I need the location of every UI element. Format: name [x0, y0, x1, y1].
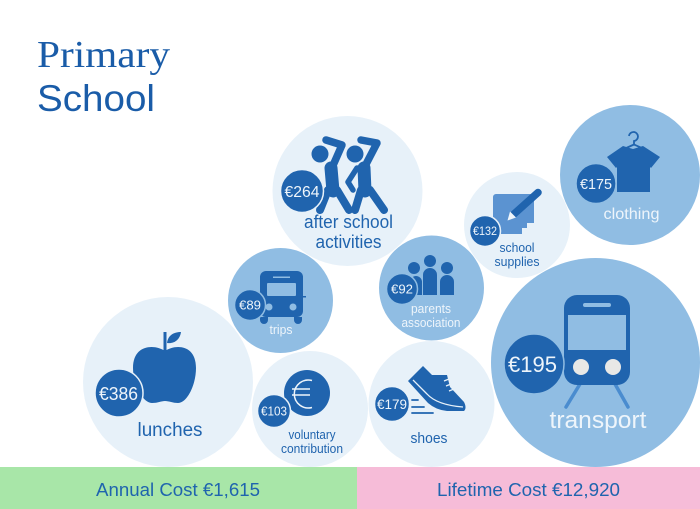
icon: running shoe — [408, 366, 466, 413]
bar: lifetime cost: Lifetime Cost €12,920 — [437, 480, 620, 500]
title: Primary — [37, 34, 170, 76]
label: lunches: lunches — [138, 420, 202, 441]
label: voluntary contribution: voluntary — [288, 428, 336, 442]
bar: annual cost — [0, 467, 357, 509]
icon: train — [564, 295, 630, 407]
panel: clothing — [560, 105, 700, 245]
badge: €386 — [95, 369, 143, 417]
icon: bus — [260, 271, 306, 324]
badge: €264: €264 — [284, 184, 320, 201]
bar: lifetime cost — [357, 467, 700, 509]
panel: shoes — [368, 341, 494, 467]
badge: €386: €386 — [99, 384, 138, 404]
panel: lunches — [83, 297, 253, 467]
panel: voluntary contribution — [252, 351, 368, 467]
label: after school activities: activities — [316, 232, 382, 252]
label: after school activities: after school — [304, 212, 393, 232]
title: School — [37, 78, 155, 119]
label: school supplies: school — [500, 241, 534, 255]
label: shoes: shoes — [410, 431, 448, 447]
badge: €264 — [280, 170, 324, 212]
label: parents association: parents — [411, 302, 451, 316]
badge: €195 — [504, 334, 564, 394]
label: trips: trips — [270, 323, 292, 337]
label: transport: transport — [550, 407, 647, 434]
badge: €175: €175 — [580, 176, 612, 193]
icon: apple — [133, 332, 196, 403]
panel: parents association — [379, 236, 484, 340]
badge: €89: €89 — [239, 298, 261, 312]
icon: t-shirt on hanger — [607, 132, 660, 192]
badge: €179: €179 — [377, 397, 407, 412]
label: voluntary contribution: contribution — [281, 442, 343, 456]
label: school supplies: supplies — [494, 255, 540, 269]
title — [37, 34, 170, 119]
icon: notepad and pencil — [493, 192, 538, 234]
badge: €195: €195 — [508, 352, 557, 377]
label: clothing: clothing — [604, 206, 660, 223]
panel: school supplies — [464, 172, 570, 278]
icon: stretching figures — [312, 140, 384, 210]
badge: €103: €103 — [261, 404, 287, 418]
label: parents association: association — [402, 316, 461, 330]
panel: trips — [228, 248, 333, 353]
icon: people — [408, 255, 454, 295]
badge: €132: €132 — [473, 224, 497, 238]
badge: €92: €92 — [391, 282, 413, 296]
icon: euro coin — [284, 370, 330, 416]
panel: transport — [491, 258, 700, 467]
panel: after school activities — [272, 116, 422, 266]
bar: annual cost: Annual Cost €1,615 — [96, 480, 260, 500]
